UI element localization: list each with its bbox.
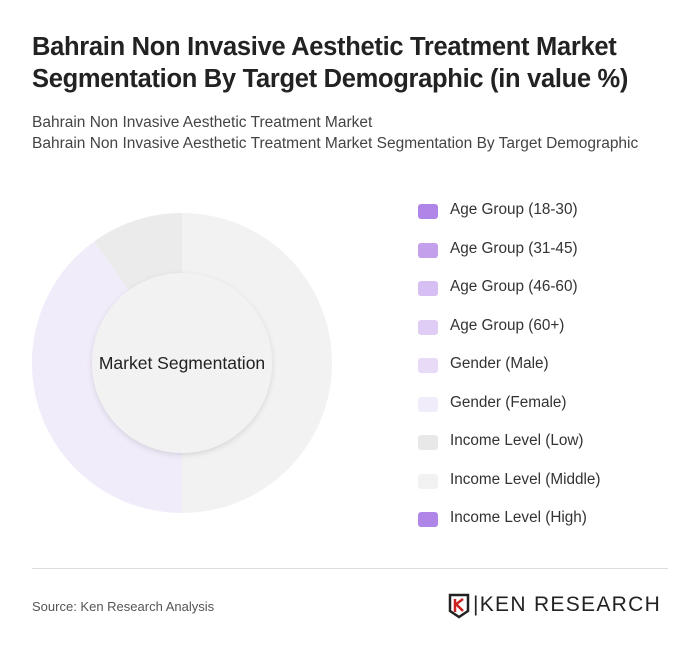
text: Age Group (60+)	[450, 316, 564, 334]
text: Income Level (High)	[450, 509, 587, 526]
subtitle: Bahrain Non Invasive Aesthetic Treatment Market Segmentation By Target Demographic	[32, 135, 638, 152]
donut chart: Market Segmentation	[99, 353, 265, 373]
text: Age Group (31-45)	[450, 240, 578, 256]
title: Bahrain Non Invasive Aesthetic Treatment Market	[32, 33, 616, 61]
title: Segmentation By Target Demographic (in value %)	[32, 65, 628, 93]
title	[32, 33, 628, 93]
text: Age Group (18-30)	[450, 201, 578, 218]
text: Gender (Male)	[450, 355, 549, 372]
text: Age Group (46-60)	[450, 278, 578, 295]
text: Gender (Female)	[450, 394, 566, 410]
text: Income Level (Low)	[450, 432, 583, 449]
source: Source: Ken Research Analysis	[32, 599, 214, 614]
subtitle: Bahrain Non Invasive Aesthetic Treatment Market	[32, 114, 372, 131]
subtitle	[32, 114, 638, 152]
text: Income Level (Middle)	[450, 470, 600, 488]
legend	[418, 201, 600, 527]
logo: |KEN RESEARCH	[473, 593, 661, 616]
